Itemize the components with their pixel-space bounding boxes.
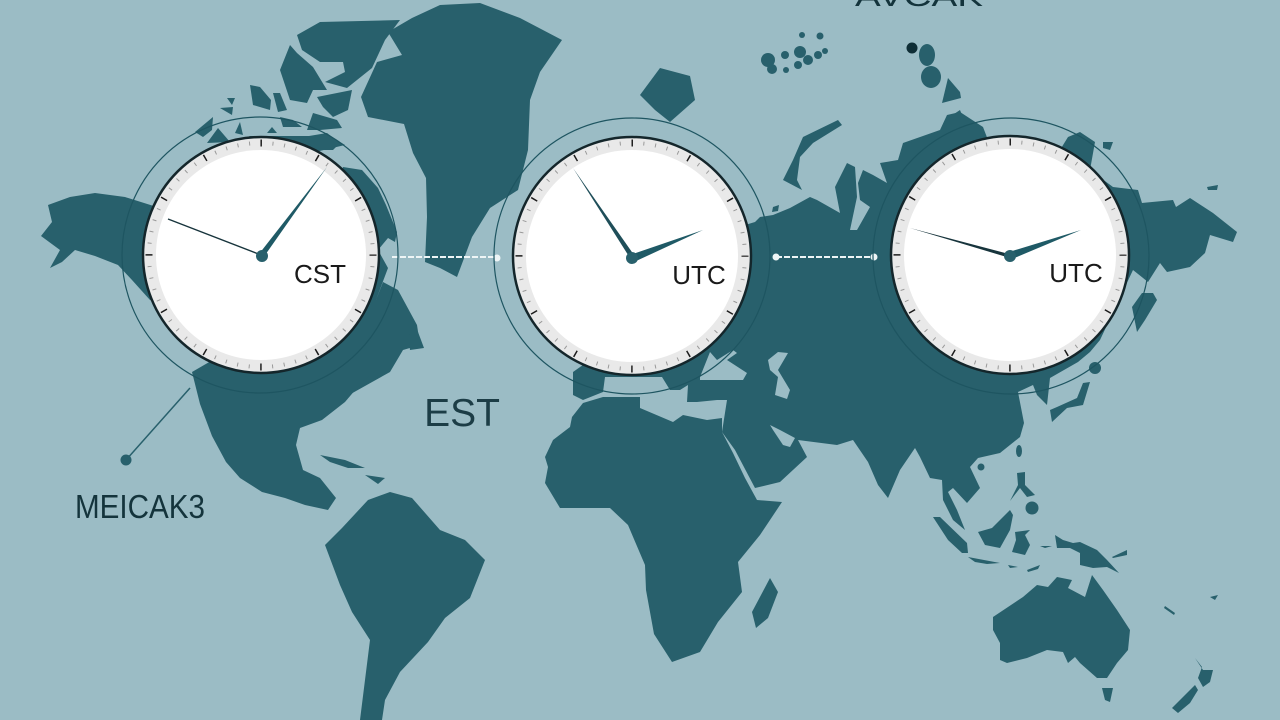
landmass: Australia (993, 575, 1130, 678)
landmass: Caribbean islands (320, 455, 385, 484)
landmass: Madagascar (752, 578, 778, 628)
hour hand (630, 230, 703, 262)
minute hand (259, 167, 327, 258)
clock: UTC centre (494, 118, 770, 394)
landmass: Southeast Asian islands (933, 445, 1127, 573)
landmass: northern archipelago specks (761, 32, 828, 74)
landmass: South America (325, 492, 485, 720)
second hand (168, 219, 261, 255)
landmass: Alaska and western Canada (41, 193, 190, 310)
marker dot: top right (906, 42, 918, 54)
map label: bottom left: MEICAK3 (75, 488, 205, 525)
callout line with dot (120, 388, 190, 466)
landmass: Africa (545, 397, 782, 662)
minute hand (573, 168, 634, 258)
landmass: Tasmania (1102, 688, 1113, 702)
landmass: United States, Mexico and Central America (192, 350, 386, 510)
hub (1004, 250, 1016, 262)
connector: UTC to UTC (772, 254, 878, 260)
landmass: eastern Canada (300, 167, 420, 400)
water: Black Sea (700, 350, 747, 380)
hour hand (1009, 230, 1081, 259)
water: Persian Gulf (770, 425, 795, 447)
landmass: New Zealand and Pacific islands (1164, 595, 1218, 713)
hub (626, 252, 638, 264)
landmass: Japan, Korea and Sakhalin (1050, 293, 1157, 422)
landmass: Greenland (361, 3, 562, 277)
water: Caspian Sea (768, 352, 790, 399)
clock label: CST (294, 259, 346, 289)
landmass: Novaya Zemlya and Svalbard (640, 68, 842, 212)
clock: CST (122, 117, 398, 393)
connector: CST to UTC (392, 254, 500, 262)
landmass: Eurasia (573, 112, 1237, 530)
landmass: Canadian arctic islands (195, 20, 400, 165)
clock: UTC right (873, 118, 1149, 394)
landmass: Newfoundland (408, 332, 424, 350)
clock label: UTC (672, 260, 726, 290)
landmass: northern Siberian islands (919, 44, 1218, 190)
minute hand (910, 228, 1010, 258)
hub (256, 250, 268, 262)
clock label: UTC (1049, 258, 1103, 288)
label: EST: EST (424, 392, 500, 435)
